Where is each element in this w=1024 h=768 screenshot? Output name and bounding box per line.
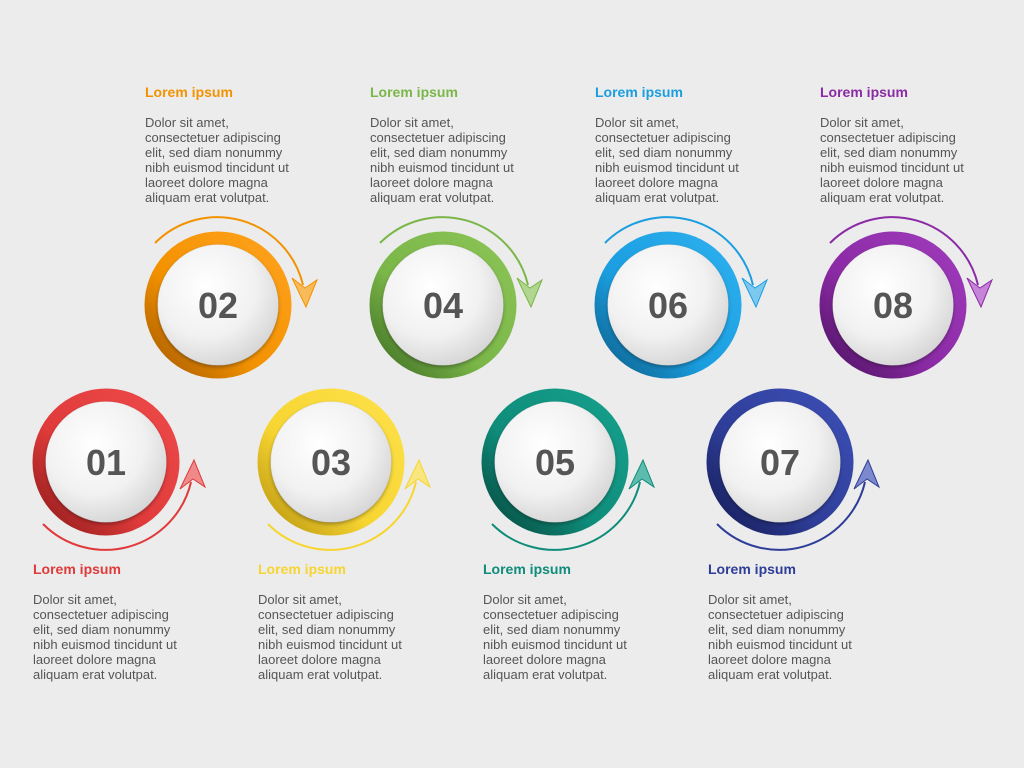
text block 03: Lorem ipsum (258, 561, 346, 577)
text block 03: consectetuer adipiscing (258, 607, 394, 622)
text block 08: nibh euismod tincidunt ut (820, 160, 964, 175)
text block 01 (33, 561, 177, 682)
text block 04 (370, 84, 514, 205)
step 02 circle (151, 217, 317, 372)
arrow 07 (717, 460, 879, 550)
text block 03: nibh euismod tincidunt ut (258, 637, 402, 652)
arrow 04 (380, 217, 542, 307)
text block 01: Lorem ipsum (33, 561, 121, 577)
text block 08 (820, 84, 964, 205)
text block 03: Dolor sit amet, (258, 592, 342, 607)
text block 01: laoreet dolore magna (33, 652, 157, 667)
text block 05: Dolor sit amet, (483, 592, 567, 607)
step 04 circle: 04 (423, 285, 463, 326)
step 07 circle: 07 (760, 442, 800, 483)
arrow 03 (268, 460, 430, 550)
step 03 circle: 03 (311, 442, 351, 483)
step 08 circle (826, 217, 992, 372)
text block 06: consectetuer adipiscing (595, 130, 731, 145)
text block 08: elit, sed diam nonummy (820, 145, 958, 160)
step 05 circle (488, 395, 654, 550)
arrow 01 (43, 460, 205, 550)
text block 05: elit, sed diam nonummy (483, 622, 621, 637)
text block 03: laoreet dolore magna (258, 652, 382, 667)
text block 04: consectetuer adipiscing (370, 130, 506, 145)
text block 05: nibh euismod tincidunt ut (483, 637, 627, 652)
text block 07: elit, sed diam nonummy (708, 622, 846, 637)
text block 01: elit, sed diam nonummy (33, 622, 171, 637)
text block 02: consectetuer adipiscing (145, 130, 281, 145)
arrow 06 (605, 217, 767, 307)
text block 02 (145, 84, 289, 205)
text block 08: Dolor sit amet, (820, 115, 904, 130)
arrow 02 (155, 217, 317, 307)
text block 02: Dolor sit amet, (145, 115, 229, 130)
text block 03: elit, sed diam nonummy (258, 622, 396, 637)
text block 03: aliquam erat volutpat. (258, 667, 382, 682)
text block 04: aliquam erat volutpat. (370, 190, 494, 205)
text block 04: nibh euismod tincidunt ut (370, 160, 514, 175)
text block 07: laoreet dolore magna (708, 652, 832, 667)
text block 02: aliquam erat volutpat. (145, 190, 269, 205)
text block 06: elit, sed diam nonummy (595, 145, 733, 160)
step 06 circle (601, 217, 767, 372)
step 08 circle: 08 (873, 285, 913, 326)
text block 04: Dolor sit amet, (370, 115, 454, 130)
text block 07: aliquam erat volutpat. (708, 667, 832, 682)
text block 01: aliquam erat volutpat. (33, 667, 157, 682)
text block 02: elit, sed diam nonummy (145, 145, 283, 160)
step 01 circle: 01 (86, 442, 126, 483)
text block 08: laoreet dolore magna (820, 175, 944, 190)
text block 06: aliquam erat volutpat. (595, 190, 719, 205)
arrow 05 (492, 460, 654, 550)
text block 05: aliquam erat volutpat. (483, 667, 607, 682)
text block 04: Lorem ipsum (370, 84, 458, 100)
text block 05: laoreet dolore magna (483, 652, 607, 667)
text block 06: nibh euismod tincidunt ut (595, 160, 739, 175)
text block 07: consectetuer adipiscing (708, 607, 844, 622)
text block 04: elit, sed diam nonummy (370, 145, 508, 160)
step 02 circle: 02 (198, 285, 238, 326)
text block 02: Lorem ipsum (145, 84, 233, 100)
text block 04: laoreet dolore magna (370, 175, 494, 190)
text block 07 (708, 561, 852, 682)
text block 01: Dolor sit amet, (33, 592, 117, 607)
text block 05: Lorem ipsum (483, 561, 571, 577)
text block 07: Dolor sit amet, (708, 592, 792, 607)
text block 07: nibh euismod tincidunt ut (708, 637, 852, 652)
arrow 08 (830, 217, 992, 307)
step 03 circle (264, 395, 430, 550)
text block 07: Lorem ipsum (708, 561, 796, 577)
text block 06: Dolor sit amet, (595, 115, 679, 130)
text block 06: Lorem ipsum (595, 84, 683, 100)
step 04 circle (376, 217, 542, 372)
text block 06 (595, 84, 739, 205)
text block 05 (483, 561, 627, 682)
text block 05: consectetuer adipiscing (483, 607, 619, 622)
text block 01: consectetuer adipiscing (33, 607, 169, 622)
text block 02: laoreet dolore magna (145, 175, 269, 190)
step 01 circle (39, 395, 205, 550)
text block 08: Lorem ipsum (820, 84, 908, 100)
text block 06: laoreet dolore magna (595, 175, 719, 190)
step 07 circle (713, 395, 879, 550)
text block 08: consectetuer adipiscing (820, 130, 956, 145)
text block 08: aliquam erat volutpat. (820, 190, 944, 205)
text block 03 (258, 561, 402, 682)
text block 02: nibh euismod tincidunt ut (145, 160, 289, 175)
step 05 circle: 05 (535, 442, 575, 483)
step 06 circle: 06 (648, 285, 688, 326)
text block 01: nibh euismod tincidunt ut (33, 637, 177, 652)
